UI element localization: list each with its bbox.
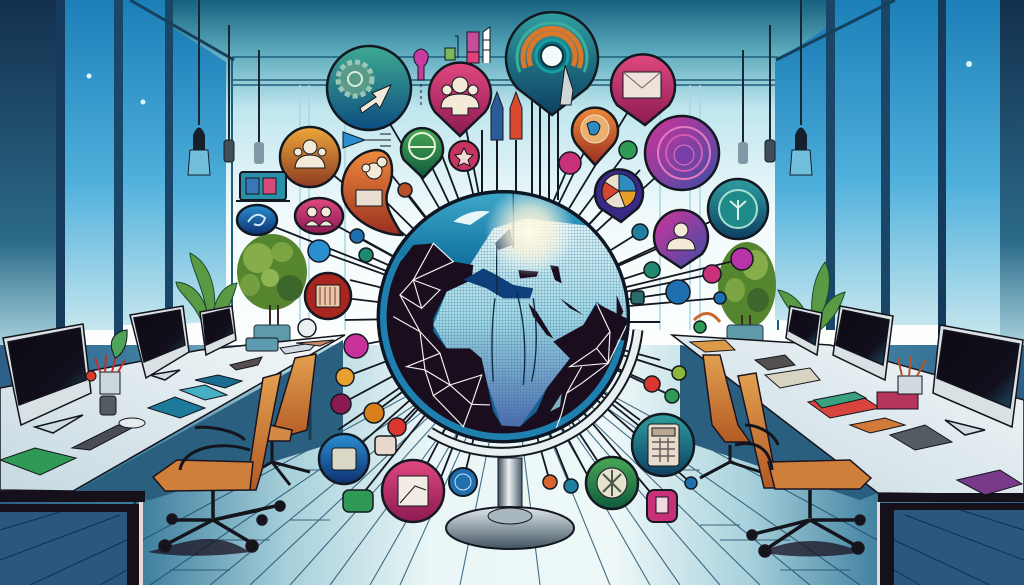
right desk items — [690, 340, 1022, 495]
left tree and pot — [237, 234, 307, 345]
back wall background — [0, 0, 1024, 360]
right wall and windows — [775, 0, 1024, 345]
bubble: ledger icon — [305, 273, 351, 319]
bar chart icon — [445, 27, 490, 63]
bubble: pink people left — [295, 198, 343, 234]
left desk — [0, 335, 345, 585]
right chair rear — [700, 355, 770, 478]
bubble: group of people — [429, 63, 491, 136]
bubble: purple rings — [645, 116, 719, 190]
bubble: pie chart — [595, 169, 643, 222]
right pendant lamps — [738, 0, 812, 175]
right monitors — [786, 306, 1023, 435]
small arrow icon — [343, 132, 391, 148]
network — [393, 243, 627, 432]
bubble: red star — [449, 141, 479, 171]
pin icon — [414, 49, 428, 105]
globe stand — [430, 322, 660, 549]
connection lines — [257, 87, 742, 505]
bubble: magenta image — [382, 460, 444, 522]
left pendant lamps — [188, 0, 264, 175]
bubble: envelope — [611, 54, 675, 125]
right potted plant — [778, 262, 845, 330]
glare — [486, 194, 573, 276]
bubble: blue swirl — [237, 205, 277, 235]
small right nodes — [543, 141, 753, 493]
land masses light — [433, 218, 633, 427]
right tree and pot — [718, 242, 776, 345]
bubble: colourful rings — [506, 12, 598, 115]
ocean rim band — [383, 254, 622, 437]
left chair rear — [240, 354, 316, 485]
floor — [0, 340, 1024, 585]
left wall and windows — [0, 0, 234, 345]
left desk items — [0, 330, 334, 475]
right chair front — [735, 373, 871, 557]
bubble: orange globe — [572, 108, 618, 165]
globe — [377, 185, 633, 443]
bubble: gear and growth arrow — [327, 46, 411, 130]
bubble: green pin — [401, 128, 443, 178]
bubble: orange speech shape — [342, 150, 402, 235]
small left nodes — [298, 183, 412, 512]
dark continents — [377, 243, 628, 443]
left monitors — [3, 306, 236, 433]
bubble: blue book — [319, 434, 369, 484]
left potted plant — [176, 253, 237, 330]
right desk — [672, 335, 1024, 585]
back wall beams — [232, 57, 778, 330]
bubble: tree emblem — [708, 179, 768, 239]
bubble: magenta tablet — [647, 490, 677, 522]
bubble: people orange — [280, 127, 340, 187]
screen icon — [236, 172, 290, 201]
bubble: blue swirl bottom — [449, 468, 477, 496]
bubble: person icon — [654, 210, 708, 268]
left chair front — [153, 373, 285, 552]
bubble: calculator — [632, 414, 694, 476]
bubble: green wheel — [586, 457, 638, 509]
meridian lines — [492, 185, 536, 385]
pencils and poles — [482, 92, 558, 200]
